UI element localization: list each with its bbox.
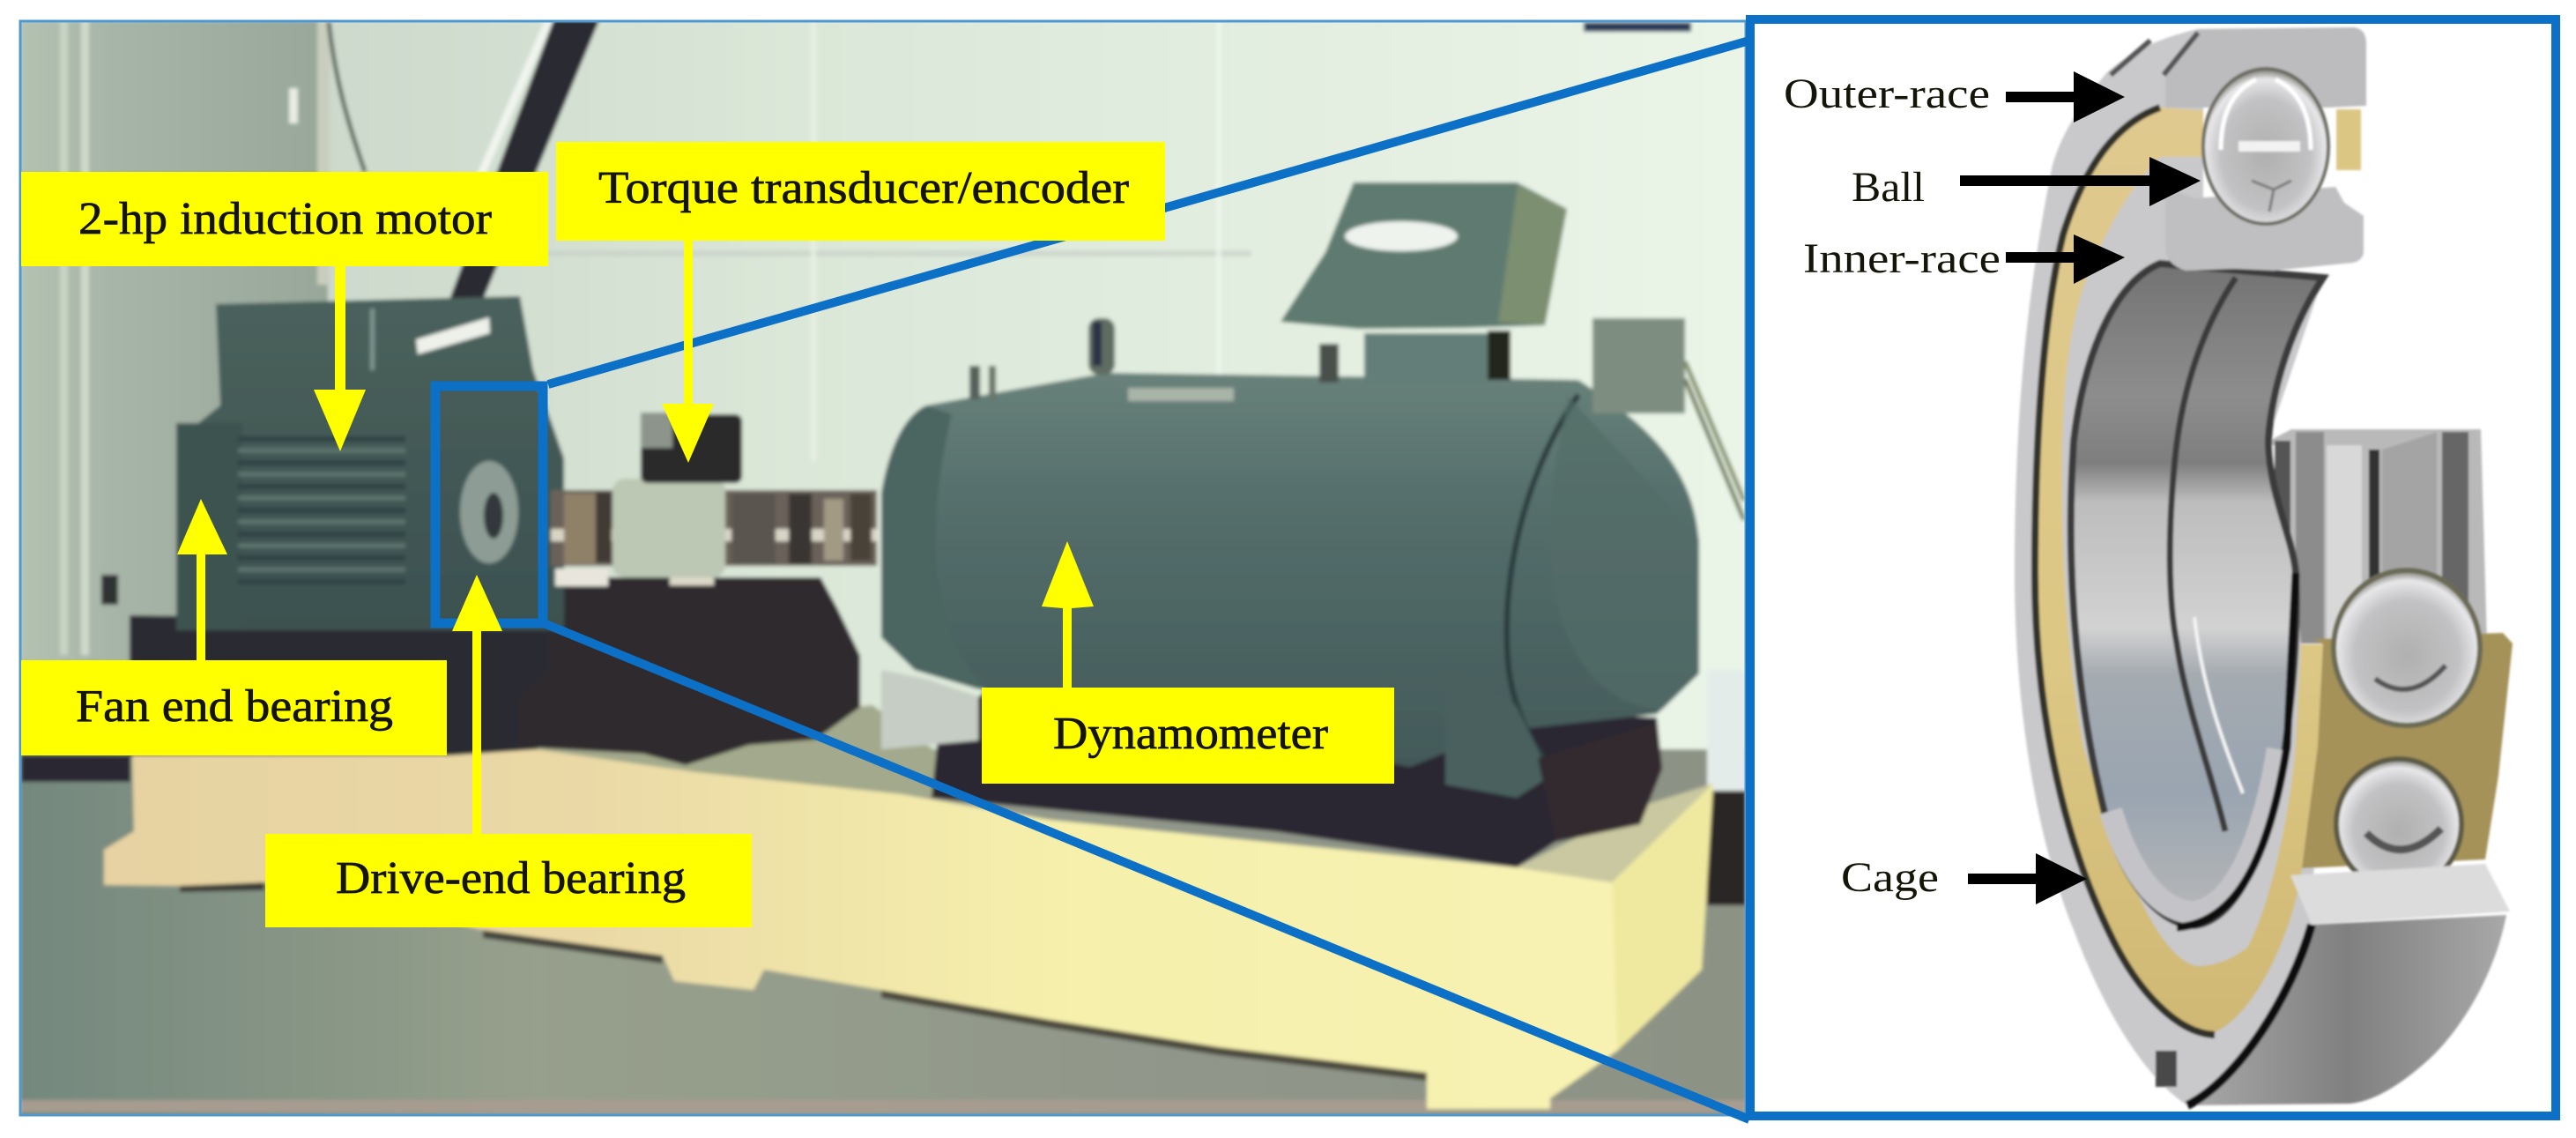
panel background and border bbox=[1750, 19, 2556, 1116]
motor fins bbox=[238, 439, 405, 582]
label with arrow: cage bbox=[1841, 853, 2087, 904]
dark diagonal pole bbox=[449, 20, 599, 300]
label with arrow: inner-race bbox=[1803, 234, 2125, 284]
floor bbox=[19, 749, 1747, 1119]
dynamometer lower corner bbox=[1443, 704, 1544, 800]
photo frame bbox=[20, 21, 1746, 1115]
outer ring black edge bbox=[2187, 925, 2312, 1105]
light area left of dynamometer bbox=[881, 670, 978, 749]
label with arrow: outer-race bbox=[1784, 71, 2125, 123]
label: drive-end bearing bbox=[265, 834, 752, 927]
far right wall and dark object bbox=[1707, 670, 1746, 793]
small gold tab behind the top ball bbox=[2336, 109, 2361, 170]
top ball bbox=[2203, 69, 2328, 224]
label with arrow: ball bbox=[1852, 157, 2201, 211]
motor base bbox=[130, 615, 582, 755]
inner ring top section bbox=[2165, 187, 2364, 271]
label with arrow: outer-race: Outer-race bbox=[1784, 71, 1990, 117]
ring notch bbox=[2156, 1051, 2177, 1087]
bore black edge bbox=[2177, 573, 2296, 927]
inner bore surface bbox=[2071, 264, 2323, 926]
dynamometer base bbox=[932, 688, 1662, 867]
shaft and couplings bbox=[551, 490, 877, 566]
wooden base bbox=[104, 747, 1713, 1109]
motor nameplate bbox=[416, 317, 490, 354]
connector line: bottom zoom ray bbox=[539, 621, 1749, 1119]
label: dynamometer bbox=[982, 688, 1394, 784]
label: torque transducer/encoder bbox=[556, 142, 1165, 241]
connector line: top zoom ray bbox=[548, 41, 1749, 384]
grey cabinet bbox=[21, 23, 330, 660]
arrow: dynamometer bbox=[1042, 541, 1094, 689]
label with arrow: ball: Ball bbox=[1852, 164, 1925, 211]
side box and cables bbox=[1592, 318, 1685, 413]
coupling base bbox=[517, 577, 860, 765]
label: fan end bearing: Fan end bearing bbox=[76, 681, 393, 732]
label: 2-hp induction motor bbox=[21, 172, 548, 266]
panel: test rig photograph bbox=[19, 20, 1747, 1119]
torque transducer bbox=[612, 479, 725, 577]
arrow: fan end bearing bbox=[177, 499, 227, 662]
ring slits bbox=[2111, 33, 2198, 75]
eye bolts bbox=[1088, 318, 1115, 375]
gold outer dark edge bbox=[2035, 108, 2215, 1035]
lower ball one bbox=[2334, 570, 2480, 725]
cage ring in gold bbox=[2037, 108, 2323, 1032]
label with arrow: cage: Cage bbox=[1841, 854, 1939, 901]
motor end shield bbox=[460, 461, 518, 563]
outer ring lower face bbox=[2290, 864, 2510, 925]
outer ring cylinder bbox=[2187, 915, 2506, 1105]
wall background bbox=[326, 23, 1745, 751]
lower ball two bbox=[2336, 759, 2461, 889]
drive-end zoom rectangle bbox=[435, 386, 543, 623]
far-side ring section bbox=[2260, 429, 2487, 643]
label: drive-end bearing: Drive-end bearing bbox=[336, 853, 686, 904]
dynamometer body bbox=[881, 373, 1699, 767]
panel: bearing close-up bbox=[1750, 19, 2556, 1116]
silver ring face bbox=[2015, 29, 2323, 1105]
arrow: drive-end bearing bbox=[452, 575, 502, 836]
motor body bbox=[176, 296, 564, 630]
cage bottom section bbox=[2301, 633, 2513, 868]
bearing illustration bbox=[2015, 27, 2513, 1105]
label: fan end bearing bbox=[21, 660, 447, 755]
bore groove bbox=[2170, 278, 2236, 831]
junction box bbox=[1364, 333, 1488, 384]
label: 2-hp induction motor: 2-hp induction motor bbox=[78, 194, 492, 244]
arrow: torque transducer bbox=[662, 238, 714, 463]
label: torque transducer/encoder: Torque transducer/encoder bbox=[598, 163, 1129, 213]
arrow: 2-hp induction motor bbox=[314, 264, 366, 451]
label with arrow: inner-race: Inner-race bbox=[1803, 235, 2001, 282]
bright highlight on bore bbox=[2194, 617, 2243, 793]
bore light inner band bbox=[2111, 749, 2278, 912]
outer ring top section bbox=[2165, 27, 2366, 108]
label: dynamometer: Dynamometer bbox=[1053, 709, 1328, 759]
